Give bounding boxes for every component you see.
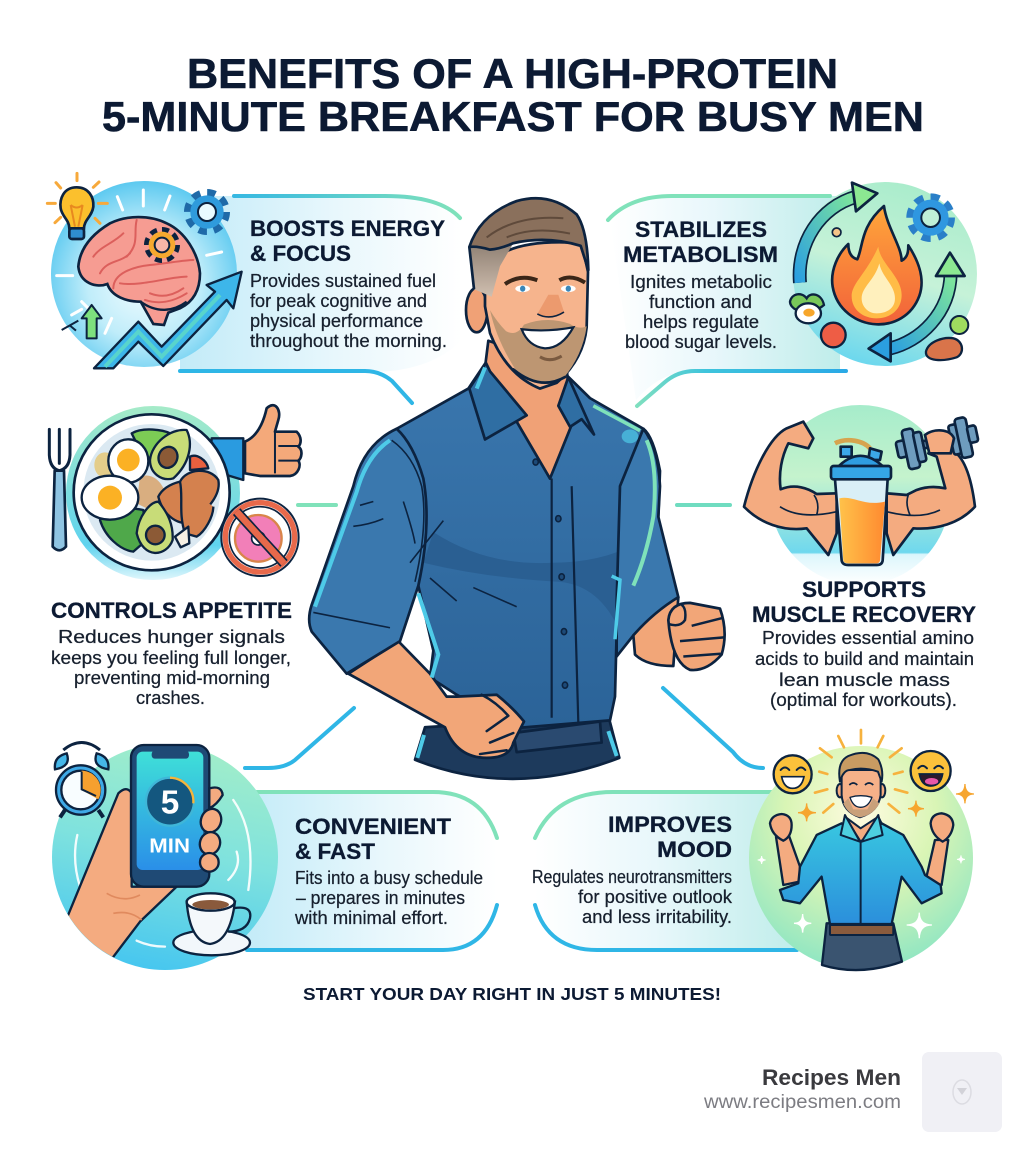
nose (537, 295, 564, 317)
right arm sleeve (593, 406, 678, 656)
panel: boosts energy and focus (47, 173, 462, 403)
body text: lean muscle mass (779, 670, 950, 690)
left sleeve (309, 429, 438, 678)
panel background (610, 196, 840, 400)
sparkles (758, 784, 974, 938)
right fist (925, 430, 954, 453)
dumbbell (893, 415, 981, 471)
body text: throughout the morning. (250, 331, 447, 351)
brand text: www.recipesmen.com (703, 1092, 901, 1113)
body text: helps regulate (643, 312, 759, 332)
panel: improves mood (532, 688, 974, 970)
heading (608, 812, 732, 862)
heading: & FAST (295, 839, 375, 864)
heading: MOOD (657, 837, 732, 862)
sun rays (815, 730, 907, 813)
heading: & FOCUS (250, 241, 351, 266)
body text: for positive outlook (578, 887, 733, 907)
light bulb (47, 173, 107, 239)
ear (466, 288, 487, 332)
muscular arms (744, 422, 975, 555)
chest shading (423, 532, 637, 632)
phone: MIN (149, 836, 190, 858)
brand logo tile (922, 1052, 1002, 1132)
heading: SUPPORTS (802, 577, 926, 602)
head (466, 198, 588, 389)
beard (490, 310, 587, 382)
heading: BOOSTS ENERGY (250, 216, 445, 241)
shirt placket and buttons (410, 459, 578, 723)
phone: 5 (161, 784, 179, 821)
body text: Provides essential amino (762, 628, 974, 648)
bottom circular arrow (869, 253, 965, 361)
right forearm and fist (633, 597, 725, 670)
rays (57, 190, 222, 333)
illustration circle (793, 182, 977, 366)
left emoji (774, 755, 812, 793)
body text (755, 628, 974, 710)
heading: MUSCLE RECOVERY (752, 602, 976, 627)
right emoji (911, 751, 951, 791)
illustration circle (52, 744, 278, 970)
panel: stabilizes metabolism (608, 182, 977, 406)
eyes (505, 278, 585, 292)
panel: supports muscle recovery (677, 405, 981, 710)
heading: IMPROVES (608, 812, 732, 837)
body text: Ignites metabolic (630, 272, 772, 292)
illustration ring (66, 406, 240, 580)
body text: crashes. (136, 688, 205, 708)
icon group: flame, arrows, gear and food (790, 183, 968, 361)
belt (830, 925, 893, 935)
icon group: brain, bulb, gears and arrow (47, 173, 242, 368)
forearms and fists (770, 813, 953, 885)
heading: CONTROLS APPETITE (51, 598, 292, 623)
body text (250, 271, 447, 351)
thumbs up hand (210, 405, 301, 480)
body text: Regulates neurotransmitters (532, 867, 732, 887)
fingers (197, 787, 224, 872)
blue gear (188, 193, 226, 231)
collar (469, 363, 594, 439)
shaker bottle (831, 440, 891, 565)
body text (625, 272, 777, 352)
food icons (790, 228, 968, 360)
heading (250, 216, 445, 266)
panel background (240, 792, 497, 950)
connector lines (245, 708, 497, 950)
mouth (522, 327, 573, 348)
title: 5-MINUTE BREAKFAST FOR BUSY MEN (102, 93, 924, 140)
heading (295, 814, 451, 864)
body text: – prepares in minutes (296, 888, 465, 908)
shirt torso (397, 364, 660, 728)
orange gear (147, 230, 177, 260)
shirt (780, 823, 942, 924)
body text: Provides sustained fuel (250, 271, 436, 291)
side fade (469, 243, 513, 297)
icon group: arms, shaker and dumbbell (744, 415, 981, 565)
muscle definition lines (780, 495, 940, 515)
body text: acids to build and maintain (755, 649, 974, 669)
hair (469, 198, 588, 270)
body text (51, 627, 291, 708)
face (485, 242, 588, 389)
head (837, 753, 885, 817)
panel background (535, 792, 800, 950)
panel background (180, 196, 462, 372)
title (102, 50, 924, 140)
central man illustration (309, 198, 725, 779)
neck and chest (485, 341, 572, 479)
fork (49, 429, 70, 550)
body text (532, 867, 733, 927)
left forearm and hand (348, 641, 524, 758)
plate (74, 414, 230, 570)
body text: Reduces hunger signals (58, 627, 285, 647)
body text: preventing mid-morning (74, 668, 270, 688)
panel: controls appetite (49, 405, 336, 708)
icon group: happy man, emojis and sparkles (758, 730, 974, 970)
food on plate (82, 429, 219, 553)
heading: STABILIZES (635, 217, 767, 242)
title: BENEFITS OF A HIGH-PROTEIN (187, 50, 838, 97)
alarm clock (55, 742, 109, 817)
body text: and less irritability. (582, 907, 732, 927)
connector lines (535, 688, 797, 950)
body text: blood sugar levels. (625, 332, 777, 352)
no-donut icon (221, 499, 299, 576)
top circular arrow (800, 183, 877, 283)
illustration circle (51, 181, 237, 367)
body text: function and (649, 292, 752, 312)
brain (78, 217, 200, 325)
blue gear (911, 198, 951, 238)
body text: Fits into a busy schedule (295, 868, 483, 888)
brand text: Recipes Men (762, 1065, 901, 1090)
hand (63, 789, 177, 970)
body text: keeps you feeling full longer, (51, 648, 291, 668)
illustration circle (749, 746, 973, 970)
middle connector (298, 503, 336, 507)
call to action: START YOUR DAY RIGHT IN JUST 5 MINUTES! (303, 984, 721, 1004)
body text: (optimal for workouts). (770, 690, 957, 710)
heading: CONVENIENT (295, 814, 451, 839)
body text: for peak cognitive and (250, 291, 427, 311)
connector lines (608, 196, 846, 406)
trousers (415, 716, 619, 779)
small up arrow (62, 305, 102, 338)
heading: METABOLISM (623, 242, 778, 267)
brand text (703, 1065, 901, 1113)
motion lines (75, 800, 251, 947)
body text (294, 868, 483, 928)
coffee cup (173, 893, 250, 955)
heading (752, 577, 976, 627)
middle connector (677, 503, 730, 507)
growth arrow (94, 272, 242, 368)
panel: convenient and fast (52, 708, 497, 970)
body text: with minimal effort. (294, 908, 448, 928)
flame (832, 206, 922, 324)
trousers (822, 923, 902, 970)
connector lines (180, 196, 460, 403)
heading (623, 217, 778, 267)
illustration circle (770, 405, 950, 585)
phone (131, 745, 209, 887)
icon group: phone, clock, hand and coffee (55, 742, 251, 970)
icon group: plate, fork, thumb and donut (49, 405, 301, 576)
collar and placket (841, 815, 883, 923)
body text: physical performance (250, 311, 423, 331)
